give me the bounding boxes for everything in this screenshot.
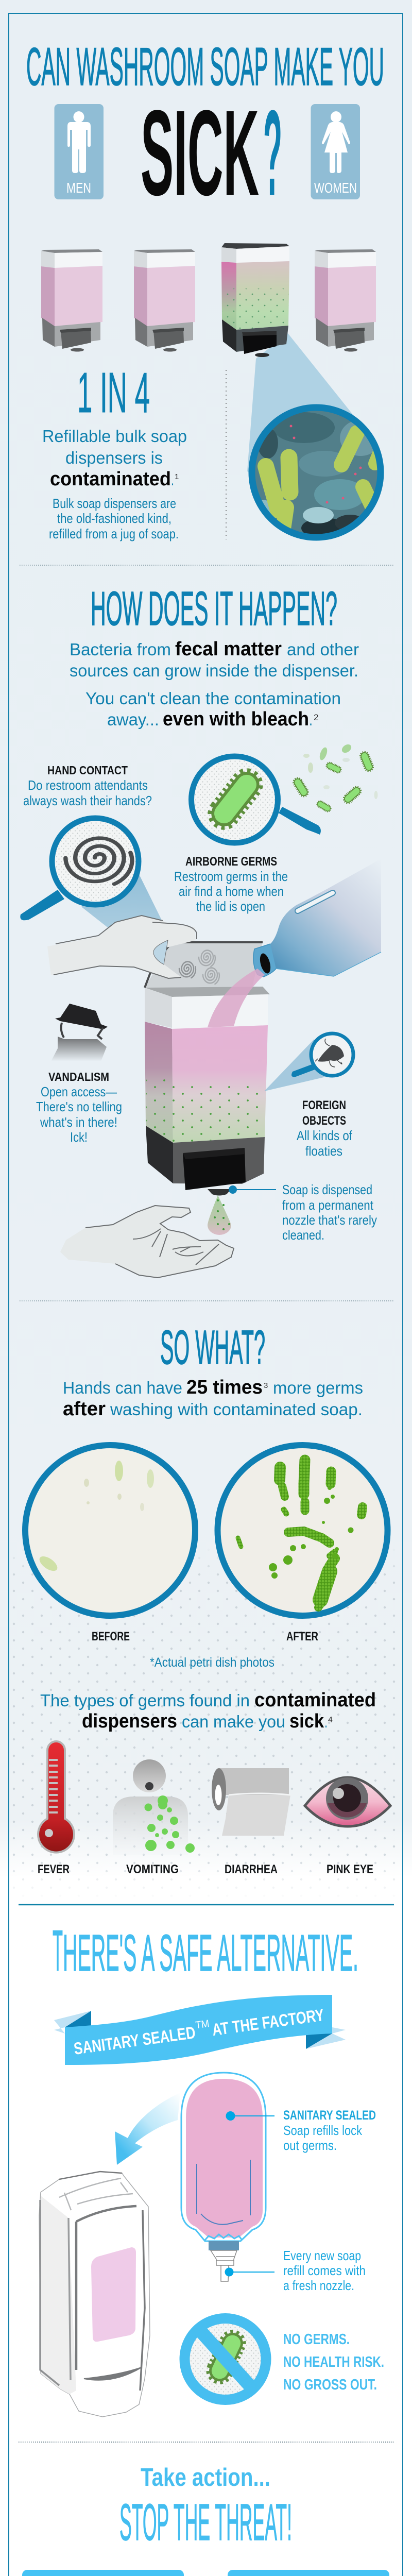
text: cannot clean: You can't clean the contamination bbox=[85, 689, 341, 708]
icon: no germs symbol bbox=[184, 2318, 266, 2400]
icon: magnifier with spiral and beam bbox=[20, 818, 184, 975]
text: no germs: NO HEALTH RISK. bbox=[283, 2354, 384, 2370]
text: foreign objects: All kinds of bbox=[297, 1128, 353, 1143]
icon: open receiving hand bbox=[60, 1206, 234, 1278]
note: petri photos: *Actual petri dish photos bbox=[150, 1655, 274, 1670]
text: airborne germs bbox=[174, 855, 288, 914]
text: vandalism: Open access— bbox=[41, 1084, 117, 1099]
open lid bbox=[145, 942, 263, 988]
text: vandalism: what's in there! bbox=[40, 1114, 117, 1130]
bacteria photo bbox=[250, 408, 381, 538]
callout: fresh nozzle: refill comes with bbox=[283, 2263, 366, 2278]
icon: toilet paper bbox=[212, 1768, 290, 1836]
callout: sanitary sealed: Soap refills lock bbox=[283, 2123, 363, 2138]
text: SO WHAT? bbox=[160, 1320, 265, 1374]
icon: magnifier with foreign object bbox=[264, 1033, 353, 1091]
text: bacteria from fecal matter: and other bbox=[287, 640, 359, 659]
icon: sealed refill bottle bbox=[181, 2073, 266, 2281]
text: cannot clean: even with bleach bbox=[163, 708, 309, 730]
dispenser 4 bbox=[315, 249, 376, 351]
text: vandalism: Ick! bbox=[70, 1129, 88, 1145]
icon: contaminated soap drop bbox=[208, 1195, 231, 1235]
text: types of germs: contaminated bbox=[254, 1689, 376, 1711]
text: 25 times: Hands can have bbox=[63, 1378, 182, 1397]
labels: symptoms: FEVER bbox=[38, 1862, 70, 1876]
text: vandalism bbox=[36, 1070, 122, 1145]
text: no germs: NO GERMS. bbox=[283, 2331, 350, 2348]
icon: men sign bbox=[55, 104, 104, 199]
text: types of germs: can make you bbox=[182, 1712, 285, 1731]
text: cannot clean bbox=[85, 689, 341, 730]
callout: sanitary sealed bbox=[226, 2108, 376, 2153]
text: refillable bulk soap: contaminated bbox=[50, 468, 171, 490]
text: refillable bulk soap: dispensers is bbox=[65, 448, 163, 467]
text: refillable bulk soap bbox=[42, 427, 187, 490]
icon: women sign bbox=[311, 104, 360, 199]
icon: vandal hat bbox=[51, 1004, 108, 1061]
text: hand contact bbox=[23, 764, 152, 808]
ribbon: sanitary sealed: SANITARY SEALED bbox=[73, 2023, 197, 2058]
text: no germs: NO GROSS OUT. bbox=[283, 2377, 377, 2393]
dispenser 1 bbox=[41, 249, 102, 351]
text: bacteria from fecal matter: Bacteria from bbox=[70, 640, 171, 659]
ribbon: sanitary sealed: TM bbox=[195, 2018, 210, 2031]
heading: safe alternative: T bbox=[53, 1919, 63, 1983]
text: 1 IN 4 bbox=[77, 361, 150, 425]
text: hand contact: HAND CONTACT bbox=[47, 764, 128, 777]
text: types of germs: dispensers bbox=[82, 1710, 177, 1732]
petri dish: before bbox=[25, 1445, 195, 1616]
text: types of germs: . bbox=[324, 1712, 328, 1731]
text: foreign objects: FOREIGN bbox=[302, 1098, 346, 1112]
callout: fresh nozzle: a fresh nozzle. bbox=[283, 2278, 354, 2293]
text: airborne germs: Restroom germs in the bbox=[174, 869, 288, 884]
text: 25 times: 3 bbox=[264, 1381, 268, 1390]
text: types of germs: sick bbox=[289, 1710, 324, 1732]
text: cannot clean: 2 bbox=[314, 713, 318, 722]
title bbox=[26, 37, 384, 221]
labels: symptoms: PINK EYE bbox=[327, 1862, 373, 1876]
callout: fresh nozzle: Every new soap bbox=[283, 2248, 361, 2263]
button: forward bbox=[22, 2570, 184, 2576]
text: 25 times: 25 times bbox=[186, 1377, 263, 1398]
heading: take action: Take action... bbox=[141, 2464, 270, 2492]
arrow: refill into dispenser bbox=[115, 2093, 180, 2165]
soap stream bbox=[208, 969, 265, 1027]
icon: women sign: WOMEN bbox=[314, 180, 357, 196]
text: types of germs bbox=[40, 1689, 376, 1732]
text: vandalism: There's no telling bbox=[36, 1099, 122, 1114]
labels: symptoms: DIARRHEA bbox=[225, 1862, 278, 1876]
dot texture bbox=[9, 1546, 403, 1901]
ribbon: sanitary sealed bbox=[54, 1995, 346, 2065]
text: no germs bbox=[283, 2331, 384, 2393]
text: cannot clean: away... bbox=[107, 710, 159, 729]
page background bbox=[0, 0, 412, 1906]
text: vandalism: VANDALISM bbox=[48, 1070, 109, 1083]
ribbon: sanitary sealed: AT THE FACTORY bbox=[211, 2005, 325, 2039]
title: ? bbox=[263, 85, 282, 221]
text: bulk soap note: the old-fashioned kind, bbox=[57, 511, 171, 526]
text: airborne germs: air find a home when bbox=[179, 884, 284, 899]
text: foreign objects: floaties bbox=[305, 1143, 342, 1159]
labels: before / after: AFTER bbox=[286, 1630, 318, 1643]
text: 25 times: washing with contaminated soap. bbox=[110, 1400, 363, 1419]
icon: thermometer bbox=[38, 1741, 74, 1853]
divider: vertical dotted bbox=[226, 370, 227, 539]
text: hand contact: always wash their hands? bbox=[23, 793, 152, 808]
text: 25 times: after bbox=[63, 1398, 106, 1420]
text: 25 times: more germs bbox=[273, 1378, 363, 1397]
dispenser 2 bbox=[134, 249, 195, 351]
text: airborne germs: the lid is open bbox=[196, 899, 265, 914]
text: bulk soap note bbox=[49, 496, 179, 541]
heading: take action bbox=[119, 2464, 292, 2551]
icon: touch free dispenser bbox=[39, 2172, 150, 2417]
labels: before / after: BEFORE bbox=[92, 1630, 130, 1643]
floating germs bbox=[293, 743, 378, 812]
petri dish: after bbox=[217, 1445, 387, 1616]
text: bulk soap note: refilled from a jug of soap. bbox=[49, 526, 179, 541]
text: foreign objects: OBJECTS bbox=[302, 1114, 346, 1128]
text: refillable bulk soap: 1 bbox=[175, 472, 179, 481]
icon: magnifier with germ bbox=[192, 756, 321, 843]
text: airborne germs: AIRBORNE GERMS bbox=[185, 855, 277, 869]
button: sign bbox=[228, 2570, 389, 2576]
text: hand contact: Do restroom attendants bbox=[28, 777, 148, 793]
text: refillable bulk soap: . bbox=[171, 470, 174, 489]
icon: men sign: MEN bbox=[66, 180, 91, 196]
callout: nozzle: from a permanent bbox=[282, 1197, 374, 1213]
contaminated dispenser bbox=[221, 243, 289, 357]
callout: fresh nozzle bbox=[225, 2248, 366, 2293]
text: foreign objects bbox=[297, 1098, 353, 1159]
soap jug bbox=[253, 859, 381, 977]
text: types of germs: The types of germs found in bbox=[40, 1691, 250, 1710]
text: bacteria from fecal matter: sources can grow inside the dispenser. bbox=[70, 661, 358, 680]
beam to bacteria photo bbox=[247, 333, 379, 515]
labels: symptoms bbox=[38, 1862, 373, 1876]
text: cannot clean: . bbox=[309, 710, 313, 729]
callout: nozzle bbox=[229, 1182, 377, 1243]
text: bulk soap note: Bulk soap dispensers are bbox=[53, 496, 176, 511]
refillable dispenser bbox=[145, 987, 270, 1195]
callout: nozzle: nozzle that's rarely bbox=[282, 1212, 377, 1228]
callout: sanitary sealed: SANITARY SEALED bbox=[283, 2108, 376, 2123]
callout: nozzle: cleaned. bbox=[282, 1227, 324, 1243]
icon: pink eye bbox=[305, 1777, 390, 1826]
icon: hand opening lid bbox=[47, 916, 197, 978]
labels: before / after bbox=[92, 1630, 318, 1643]
text: bacteria from fecal matter bbox=[70, 638, 359, 680]
callout: nozzle: Soap is dispensed bbox=[282, 1182, 372, 1197]
text: types of germs: 4 bbox=[328, 1716, 333, 1724]
text: 25 times bbox=[63, 1377, 363, 1420]
callout: sanitary sealed: out germs. bbox=[283, 2138, 337, 2153]
labels: symptoms: VOMITING bbox=[126, 1862, 179, 1876]
text: refillable bulk soap: Refillable bulk soap bbox=[42, 427, 187, 446]
icon: vomiting person bbox=[113, 1759, 195, 1855]
text: bacteria from fecal matter: fecal matter bbox=[175, 638, 282, 660]
